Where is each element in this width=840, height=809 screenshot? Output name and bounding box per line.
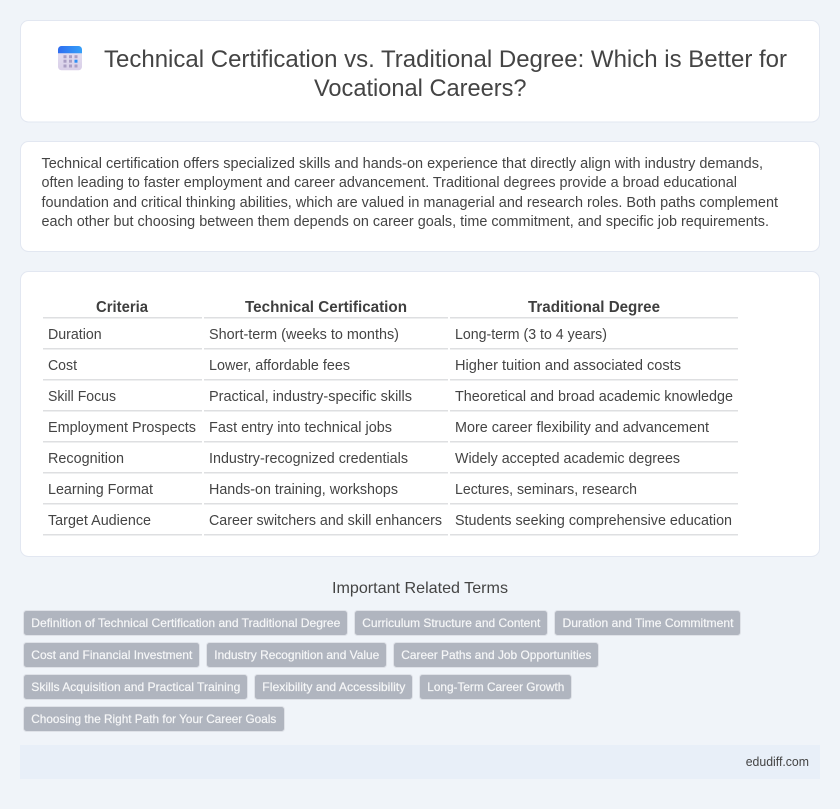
table row: recognition: Industry-recognized credentials	[209, 451, 408, 467]
tag	[24, 706, 284, 732]
table row: recognition: Recognition	[48, 451, 124, 467]
text block: summary: often leading to faster employment and career advancement. Traditional degrees provide a broad educational	[42, 174, 737, 191]
table row: skill focus: Practical, industry-specific skills	[209, 389, 412, 405]
tag: Curriculum Structure and Content	[362, 616, 541, 630]
table row: learning format	[43, 482, 738, 504]
table row: employment prospects: Fast entry into technical jobs	[209, 420, 392, 436]
panel: summary paragraph	[20, 142, 820, 252]
title: Technical Certification vs. Traditional Degree: Which is Better for	[104, 46, 787, 73]
text block: summary: each other but choosing between them depends on career goals, time commitment, and specific job requirements.	[42, 213, 769, 230]
tag: Flexibility and Accessibility	[262, 680, 405, 694]
tag: Skills Acquisition and Practical Training	[31, 680, 240, 694]
table row: target audience	[43, 513, 738, 536]
tag: Career Paths and Job Opportunities	[401, 648, 591, 662]
footer band	[20, 745, 820, 779]
tag	[554, 610, 740, 636]
table row: skill focus: Theoretical and broad academic knowledge	[455, 389, 733, 405]
text block: summary: foundation and critical thinking abilities, which are valued in managerial and research roles. Both paths complement	[42, 194, 779, 211]
table row: cost	[43, 358, 738, 380]
table header row	[43, 299, 738, 318]
table row: duration: Long-term (3 to 4 years)	[455, 327, 607, 343]
tag: Industry Recognition and Value	[214, 648, 380, 662]
tag	[394, 642, 598, 668]
panel: comparison table	[20, 272, 820, 556]
table row: learning format: Lectures, seminars, research	[455, 482, 637, 498]
tag	[420, 674, 572, 700]
table row: skill focus: Skill Focus	[48, 389, 116, 405]
tag: Definition of Technical Certification and Traditional Degree	[31, 616, 341, 630]
tag: Long-Term Career Growth	[427, 680, 564, 694]
table header row: Criteria	[96, 299, 148, 316]
table row: recognition	[43, 451, 738, 474]
table row: employment prospects: Employment Prospects	[48, 420, 196, 436]
table row: skill focus	[43, 389, 738, 412]
table header row: Traditional Degree	[528, 299, 660, 316]
tag	[24, 610, 348, 636]
table row: learning format: Learning Format	[48, 482, 153, 498]
table row: cost: Lower, affordable fees	[209, 358, 350, 374]
tag	[24, 674, 248, 700]
table row: employment prospects	[43, 420, 738, 442]
tag	[354, 610, 548, 636]
text block: summary	[42, 155, 779, 230]
title: Vocational Careers?	[314, 75, 526, 102]
table row: learning format: Hands-on training, workshops	[209, 482, 398, 498]
title	[104, 46, 787, 102]
tag	[254, 674, 412, 700]
table row: target audience: Target Audience	[48, 513, 151, 529]
tag: Cost and Financial Investment	[31, 648, 193, 662]
tag list: related terms	[24, 610, 740, 732]
table row: cost: Cost	[48, 358, 77, 374]
table row: target audience: Career switchers and skill enhancers	[209, 513, 442, 529]
tag	[24, 642, 200, 668]
table row: duration	[43, 327, 738, 350]
table row: recognition: Widely accepted academic degrees	[455, 451, 680, 467]
table row: duration: Short-term (weeks to months)	[209, 327, 399, 343]
panel: header	[20, 20, 820, 122]
icon: calendar	[58, 46, 82, 70]
table row: target audience: Students seeking comprehensive education	[455, 513, 732, 529]
tag	[206, 642, 386, 668]
text block: summary: Technical certification offers specialized skills and hands-on experience that directly align with industry demands,	[42, 155, 763, 172]
heading: related terms: Important Related Terms	[332, 580, 508, 597]
table row: duration: Duration	[48, 327, 102, 343]
tag: Choosing the Right Path for Your Career Goals	[31, 712, 276, 726]
table row: cost: Higher tuition and associated costs	[455, 358, 681, 374]
footer text: source: edudiff.com	[746, 754, 809, 769]
tag: Duration and Time Commitment	[562, 616, 734, 630]
table header row: Technical Certification	[245, 299, 407, 316]
table row: employment prospects: More career flexibility and advancement	[455, 420, 709, 436]
